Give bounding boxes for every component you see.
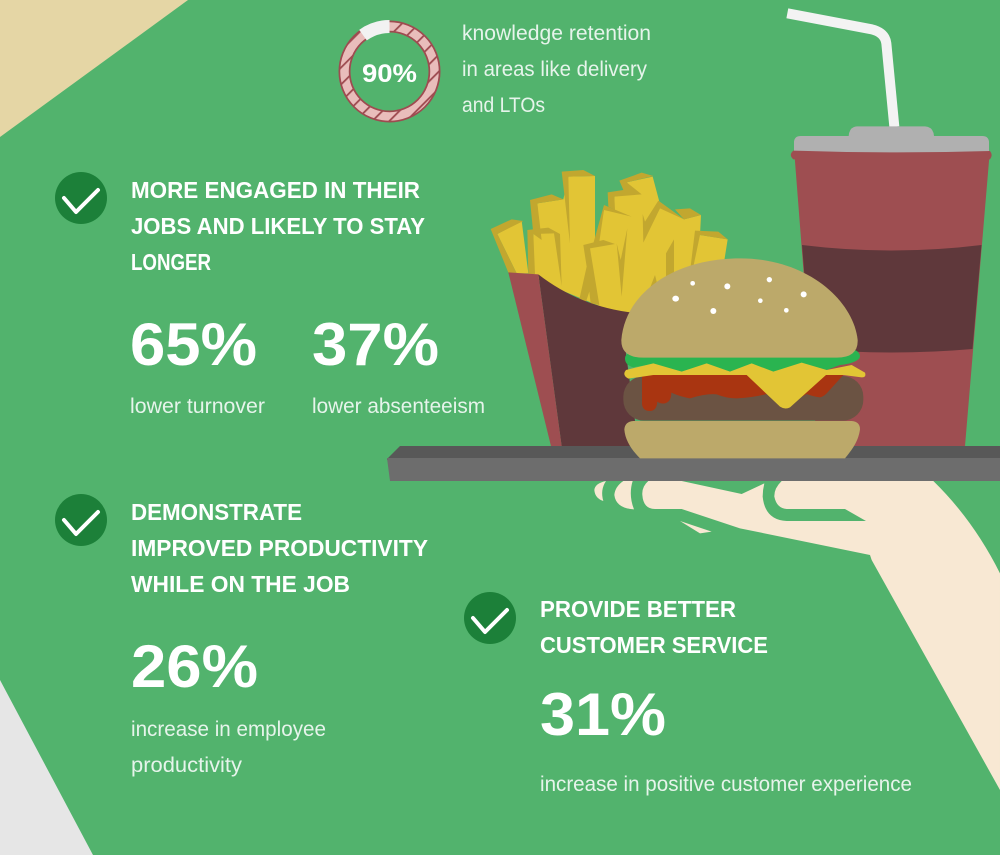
icon: burger: [621, 258, 865, 458]
stat: 37% lower absenteeism: [312, 311, 485, 418]
text: knowledge retention: in areas like delivery: [462, 58, 647, 81]
cup body: [794, 155, 990, 458]
heading: better customer service: CUSTOMER SERVICE: [540, 632, 768, 658]
stat: 31% increase in positive customer experience: [540, 681, 912, 796]
fries box front: [508, 272, 563, 458]
corner: top left beige: [0, 0, 188, 137]
heading: demonstrate improved productivity: WHILE ON THE JOB: [131, 571, 350, 597]
text: knowledge retention: and LTOs: [462, 94, 545, 117]
stat: 37% lower absenteeism: lower absenteeism: [312, 395, 485, 418]
sauce: [642, 375, 843, 411]
lettuce: [625, 350, 860, 372]
fries shadows: [491, 170, 728, 305]
icon: check 1: [55, 172, 107, 224]
text: knowledge retention: knowledge retention: [462, 22, 651, 45]
heading: more engaged: MORE ENGAGED IN THEIR: [131, 177, 420, 203]
heading: more engaged: [131, 177, 425, 275]
icon: check 3: [464, 592, 516, 644]
stat: 26% increase in employee productivity: [131, 633, 326, 777]
tray: [387, 446, 1000, 481]
icon: check 2: [55, 494, 107, 546]
heading: demonstrate improved productivity: IMPROVED PRODUCTIVITY: [131, 535, 428, 561]
icon: hand holding tray: [594, 481, 1000, 790]
heading: demonstrate improved productivity: [131, 499, 428, 597]
donut chart: 90%: [344, 26, 434, 117]
straw: [787, 13, 894, 127]
bottom bun: [624, 421, 860, 458]
icon: drink cup: [787, 13, 992, 458]
stat: 37% lower absenteeism: 37%: [312, 311, 439, 378]
fries box back: [538, 274, 640, 458]
heading: demonstrate improved productivity: DEMONSTRATE: [131, 499, 302, 525]
stat: 26% increase in employee productivity: increase in employee: [131, 718, 326, 741]
stat: 26% increase in employee productivity: 26%: [131, 633, 258, 700]
cup rim: [791, 151, 992, 159]
cup lid: [794, 126, 989, 153]
stat: 31% increase in positive customer experience: 31%: [540, 681, 666, 748]
cup band: [802, 245, 982, 352]
sesame seeds: [672, 277, 807, 314]
fries yellow base: [497, 176, 728, 320]
top bun: [621, 258, 858, 358]
stat: 65% lower turnover: lower turnover: [130, 395, 265, 418]
stat: 26% increase in employee productivity: productivity: [131, 754, 243, 777]
patty: [623, 376, 863, 421]
text: knowledge retention: [462, 22, 651, 117]
stat: 65% lower turnover: [130, 311, 265, 418]
heading: better customer service: [540, 596, 768, 658]
stat: 31% increase in positive customer experience: increase in positive customer experience: [540, 773, 912, 796]
heading: more engaged: JOBS AND LIKELY TO STAY: [131, 213, 425, 239]
heading: more engaged: LONGER: [131, 249, 211, 275]
stat: 65% lower turnover: 65%: [130, 311, 257, 378]
icon: fries: [491, 170, 728, 458]
cheese: [624, 363, 865, 409]
corner: bottom left grey: [0, 680, 93, 855]
heading: better customer service: PROVIDE BETTER: [540, 596, 736, 622]
donut chart: 90%: 90%: [362, 60, 417, 88]
